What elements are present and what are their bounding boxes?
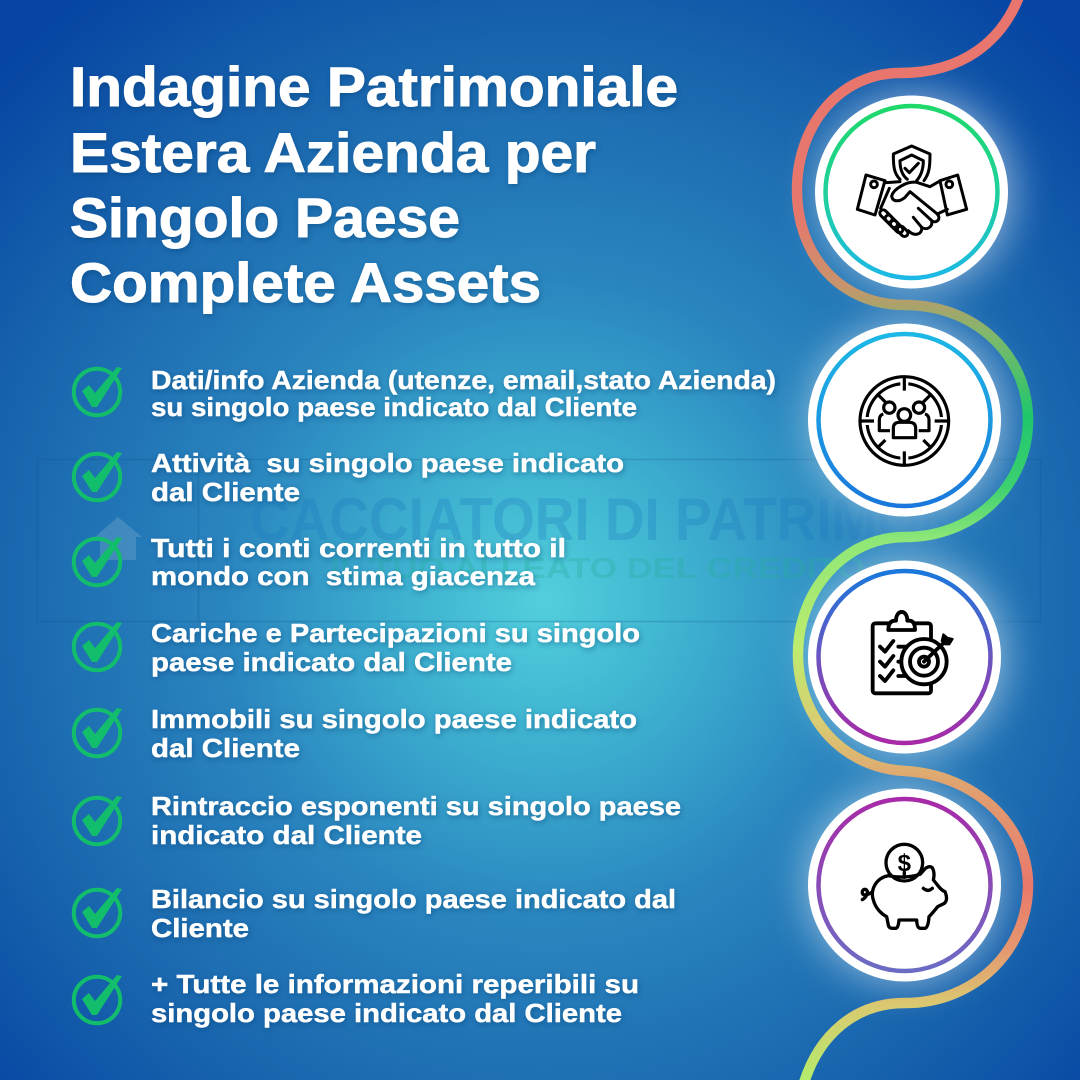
item 7: Cliente <box>151 913 249 943</box>
title: Singolo Paese <box>70 186 460 249</box>
white glows behind circles <box>806 94 1014 983</box>
item 3: mondo con stima giacenza <box>151 561 536 591</box>
item 5 <box>74 704 637 763</box>
item 7: Bilancio su singolo paese indicato dal <box>151 884 676 914</box>
item 8: + Tutte le informazioni reperibili su <box>151 969 639 999</box>
badge 2: target people <box>808 324 1001 516</box>
item 3: Tutti i conti correnti in tutto il <box>151 533 566 563</box>
title: Complete Assets <box>70 251 541 314</box>
item 2 <box>74 448 624 507</box>
item 5: dal Cliente <box>151 733 300 763</box>
item 2: dal Cliente <box>151 477 300 507</box>
icon: checklist and target <box>873 612 953 693</box>
item 8: singolo paese indicato dal Cliente <box>151 998 622 1028</box>
item 7 <box>74 884 676 943</box>
item 3 <box>74 533 566 591</box>
item 6: indicato dal Cliente <box>151 820 422 850</box>
item 2: Attività su singolo paese indicato <box>151 448 624 478</box>
item 1: su singolo paese indicato dal Cliente <box>151 392 637 422</box>
watermark logo: CACCIATORI DI PATRIMONI <box>250 486 975 553</box>
item 6: Rintraccio esponenti su singolo paese <box>151 791 681 821</box>
icon: piggy bank with coin: $ <box>898 850 911 877</box>
item 4: Cariche e Partecipazioni su singolo <box>151 618 640 648</box>
title: Estera Azienda per <box>70 121 596 184</box>
wavy gradient ribbon <box>797 0 1028 1080</box>
icon: handshake with shield <box>857 146 967 238</box>
watermark logo <box>38 460 1040 622</box>
item 1 <box>74 365 776 422</box>
title <box>70 55 678 314</box>
item 4: paese indicato dal Cliente <box>151 647 512 677</box>
badge 1: handshake <box>815 96 1008 288</box>
title: Indagine Patrimoniale <box>70 55 678 118</box>
item 8 <box>74 969 639 1028</box>
badge 4: piggy bank <box>808 788 1001 982</box>
item 6 <box>74 791 681 850</box>
watermark logo: IL TUO ALLEATO DEL CREDITO <box>330 553 865 585</box>
item 1: Dati/info Azienda (utenze, email,stato Azienda) <box>151 365 776 395</box>
badge 3: clipboard target <box>808 560 1001 754</box>
item 5: Immobili su singolo paese indicato <box>151 704 637 734</box>
checklist <box>74 365 776 1028</box>
item 4 <box>74 618 640 677</box>
icon: piggy bank with coin <box>862 844 947 928</box>
icon: target with people <box>860 377 949 465</box>
